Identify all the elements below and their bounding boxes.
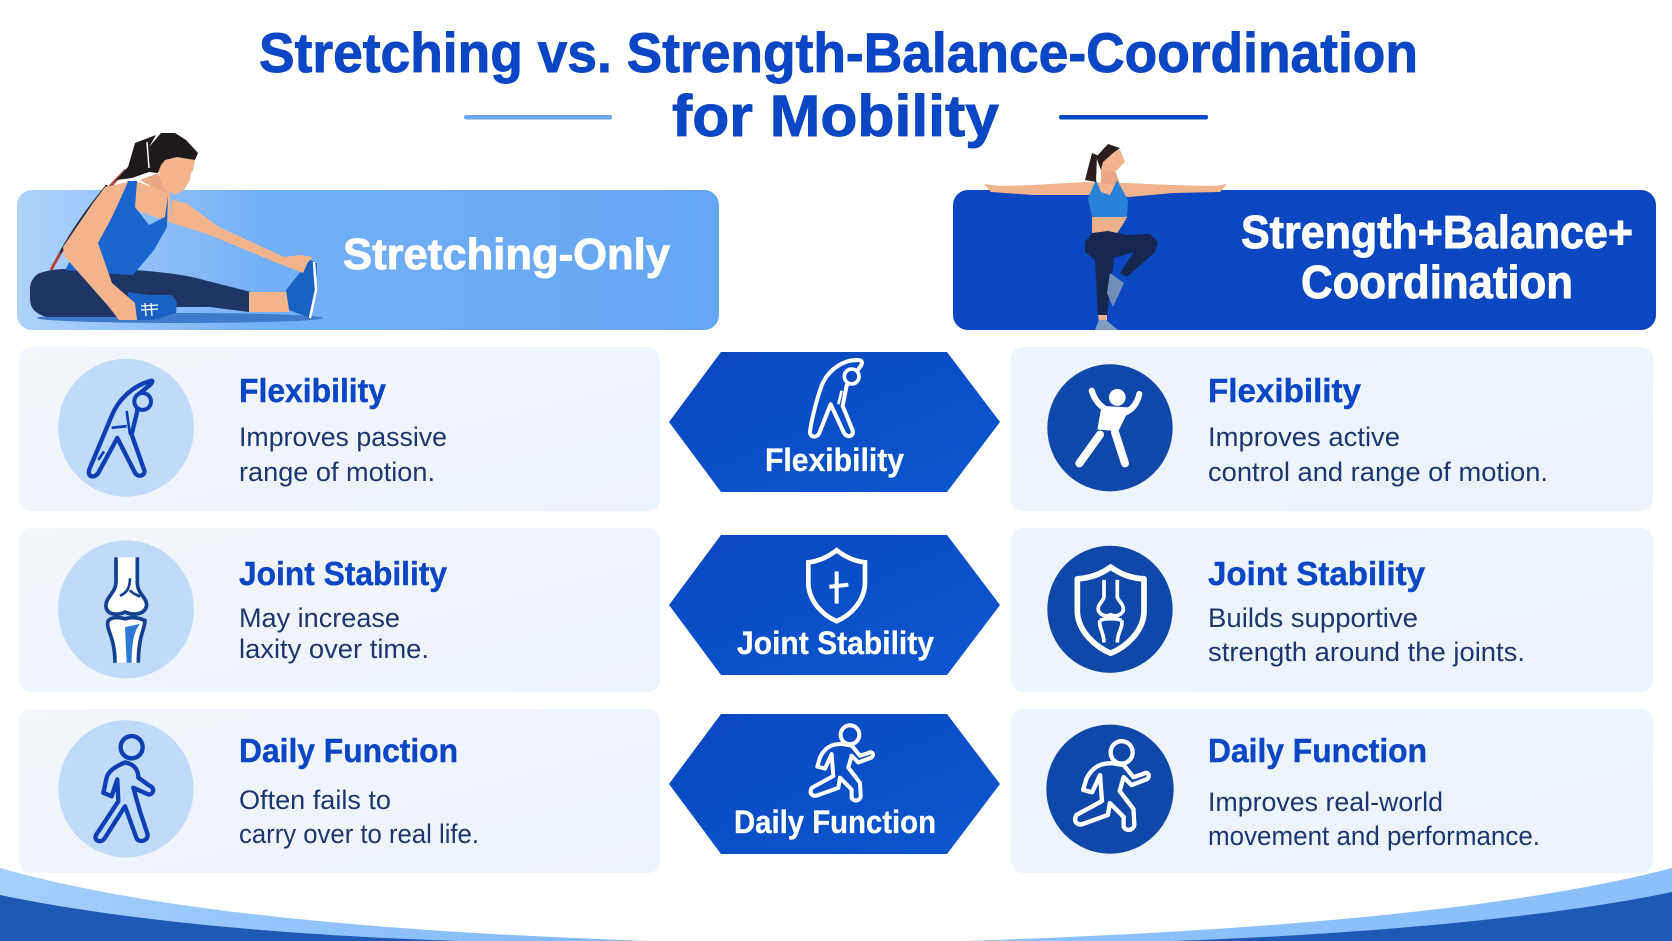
text: improves active control: Improves active [1208,422,1400,452]
text: improves passive range [239,422,447,487]
heading: joint stability: Joint Stability [1208,555,1426,592]
text: improves active control: control and range of motion. [1208,457,1548,487]
panel: strength daily function [1011,709,1653,873]
icon: knee joint [58,540,194,678]
center badge: flexibility [669,352,1000,492]
label: joint stability: Joint Stability [737,625,934,661]
text: improves active control [1208,422,1548,487]
panel: strength joint stability [1011,528,1653,692]
banner: stretching-only [17,190,719,330]
banner heading: strength balance coordination: Coordination [1301,256,1573,308]
text: improves real-world movement: movement and performance. [1208,821,1540,851]
text: builds supportive strength [1208,603,1525,667]
icon: shield with cross [808,550,865,621]
illustration: seated woman stretching [30,133,323,323]
panel: stretching flexibility [19,347,660,511]
text: builds supportive strength: Builds supportive [1208,603,1418,633]
footer wave decoration [0,868,1672,941]
heading: daily function: Daily Function [239,732,458,769]
text: builds supportive strength: strength around the joints. [1208,637,1525,667]
center badge: joint stability [669,535,1000,675]
title [259,21,1418,149]
text: may increase laxity [239,603,429,664]
text: often fails to carry over: carry over to real life. [239,819,479,849]
text: improves passive range: Improves passive [239,422,447,452]
banner heading: strength balance coordination [1241,206,1633,308]
icon: shielded knee [1047,546,1173,673]
icon: active figure [1047,364,1173,491]
banner heading: stretching-only: Stretching-Only [343,230,671,279]
text: improves passive range: range of motion. [239,457,435,487]
banner heading: strength balance coordination: Strength+Balance+ [1241,206,1633,258]
icon: runner outline [811,725,873,800]
heading: daily function: Daily Function [1208,732,1427,769]
title: Stretching vs. Strength-Balance-Coordination [259,21,1418,84]
label: daily function: Daily Function [734,804,936,840]
panel: strength flexibility [1011,347,1653,511]
illustration: woman balancing on one leg [984,144,1227,330]
panel: stretching joint stability [19,528,660,692]
label: flexibility: Flexibility [765,442,904,478]
text: improves real-world movement: Improves real-world [1208,787,1443,817]
heading: flexibility: Flexibility [239,372,387,409]
panel: stretching daily function [19,709,660,873]
text: may increase laxity: May increase [239,603,400,633]
icon: walking figure [58,720,194,857]
banner: strength balance coordination [953,190,1656,330]
icon: runner in circle [1046,725,1174,854]
title: for Mobility [672,84,999,149]
icon: side-bend outline [810,360,862,437]
text: may increase laxity: laxity over time. [239,634,429,664]
center badge: daily function [669,714,1000,854]
text: improves real-world movement [1208,787,1540,851]
icon: side-bend figure [58,359,194,497]
text: often fails to carry over: Often fails to [239,785,391,815]
text: often fails to carry over [239,785,479,849]
heading: flexibility: Flexibility [1208,372,1362,409]
heading: joint stability: Joint Stability [239,555,448,592]
